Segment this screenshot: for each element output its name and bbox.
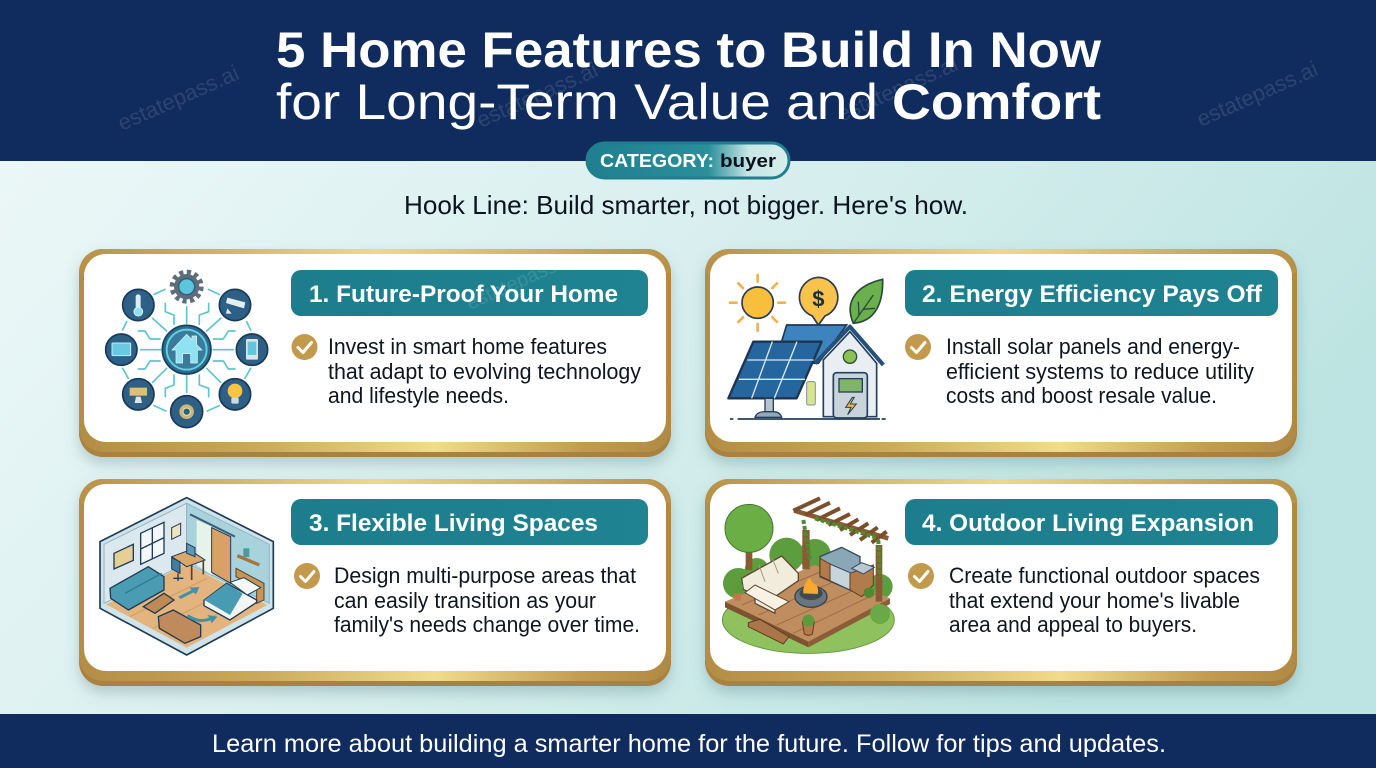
footer band: [0, 714, 1376, 768]
text block: card 1: [328, 334, 642, 408]
thermometer: [136, 294, 141, 310]
title: [276, 22, 1101, 130]
heading: card 1: 1. Future-Proof Your Home: [309, 281, 618, 308]
text block: card 3: [334, 563, 640, 637]
watermarks in header: estatepass.ai: [833, 51, 961, 127]
title: 5 Home Features to Build In Now: [276, 22, 1101, 78]
text block: card 3: family's needs change over time.: [334, 612, 640, 637]
text block: card 4: area and appeal to buyers.: [949, 612, 1197, 637]
heading: card 2: 2. Energy Efficiency Pays Off: [922, 281, 1263, 308]
check icon: card 3: [294, 563, 320, 589]
heading: card 3: [291, 499, 648, 545]
heading: card 3: 3. Flexible Living Spaces: [309, 510, 598, 537]
heading: card 1: estatepass: [463, 255, 560, 315]
watermarks in header: estatepass.ai: [1193, 56, 1321, 132]
watermarks in header: estatepass.ai: [114, 60, 242, 136]
text block: card 1: that adapt to evolving technology: [328, 359, 642, 384]
text block: card 2: costs and boost resale value.: [946, 383, 1217, 408]
lock dial: [179, 404, 194, 419]
title: Comfort: [892, 74, 1101, 130]
text block: card 4: [949, 563, 1260, 637]
text block: card 2: efficient systems to reduce utility: [946, 359, 1255, 384]
category badge: CATEGORY:: [600, 151, 714, 171]
heading: card 4: 4. Outdoor Living Expansion: [922, 510, 1254, 537]
icon: outdoor deck: [722, 498, 894, 653]
icon: solar house: [728, 275, 886, 419]
header band: [0, 0, 1376, 161]
watermarks in header: estatepass.ai: [473, 57, 601, 133]
panel: card 3: [79, 479, 671, 686]
gear: [173, 273, 201, 301]
text block: card 4: that extend your home's livable: [949, 588, 1240, 613]
background: [0, 161, 1376, 714]
text block: card 4: Create functional outdoor spaces: [949, 563, 1260, 588]
icon: flexible room: [100, 498, 273, 655]
hook line: Hook Line: Build smarter, not bigger. Here's how.: [404, 190, 968, 220]
panel heater: [130, 388, 147, 396]
bulb: [228, 384, 242, 398]
panel: card 2: [705, 249, 1297, 457]
text block: card 2: Install solar panels and energy-: [946, 334, 1240, 359]
text block: card 2: [946, 334, 1255, 408]
check icon: card 1: [292, 334, 318, 360]
icon: smart home network: [106, 273, 268, 428]
title: for Long-Term Value and: [276, 74, 878, 130]
panel: card 1: [79, 249, 671, 457]
heading: card 4: [905, 499, 1278, 545]
monitor: [112, 343, 131, 356]
check icon: card 2: [905, 334, 931, 360]
check icon: card 4: [908, 563, 934, 589]
icon: solar house: $: [812, 286, 824, 311]
category badge: buyer: [720, 151, 776, 171]
text block: card 1: and lifestyle needs.: [328, 383, 509, 408]
heading: card 1: [291, 255, 648, 316]
text block: card 3: can easily transition as your: [334, 588, 596, 613]
text block: card 3: Design multi-purpose areas that: [334, 563, 637, 588]
category badge: [587, 143, 789, 178]
footer text: Learn more about building a smarter home for the future. Follow for tips and updates.: [212, 730, 1166, 758]
camera: [226, 298, 245, 308]
phone: [246, 339, 258, 360]
heading: card 2: [905, 270, 1278, 316]
panel: card 4: [705, 479, 1297, 686]
watermarks in header: [114, 51, 1321, 136]
text block: card 1: Invest in smart home features: [328, 334, 607, 359]
